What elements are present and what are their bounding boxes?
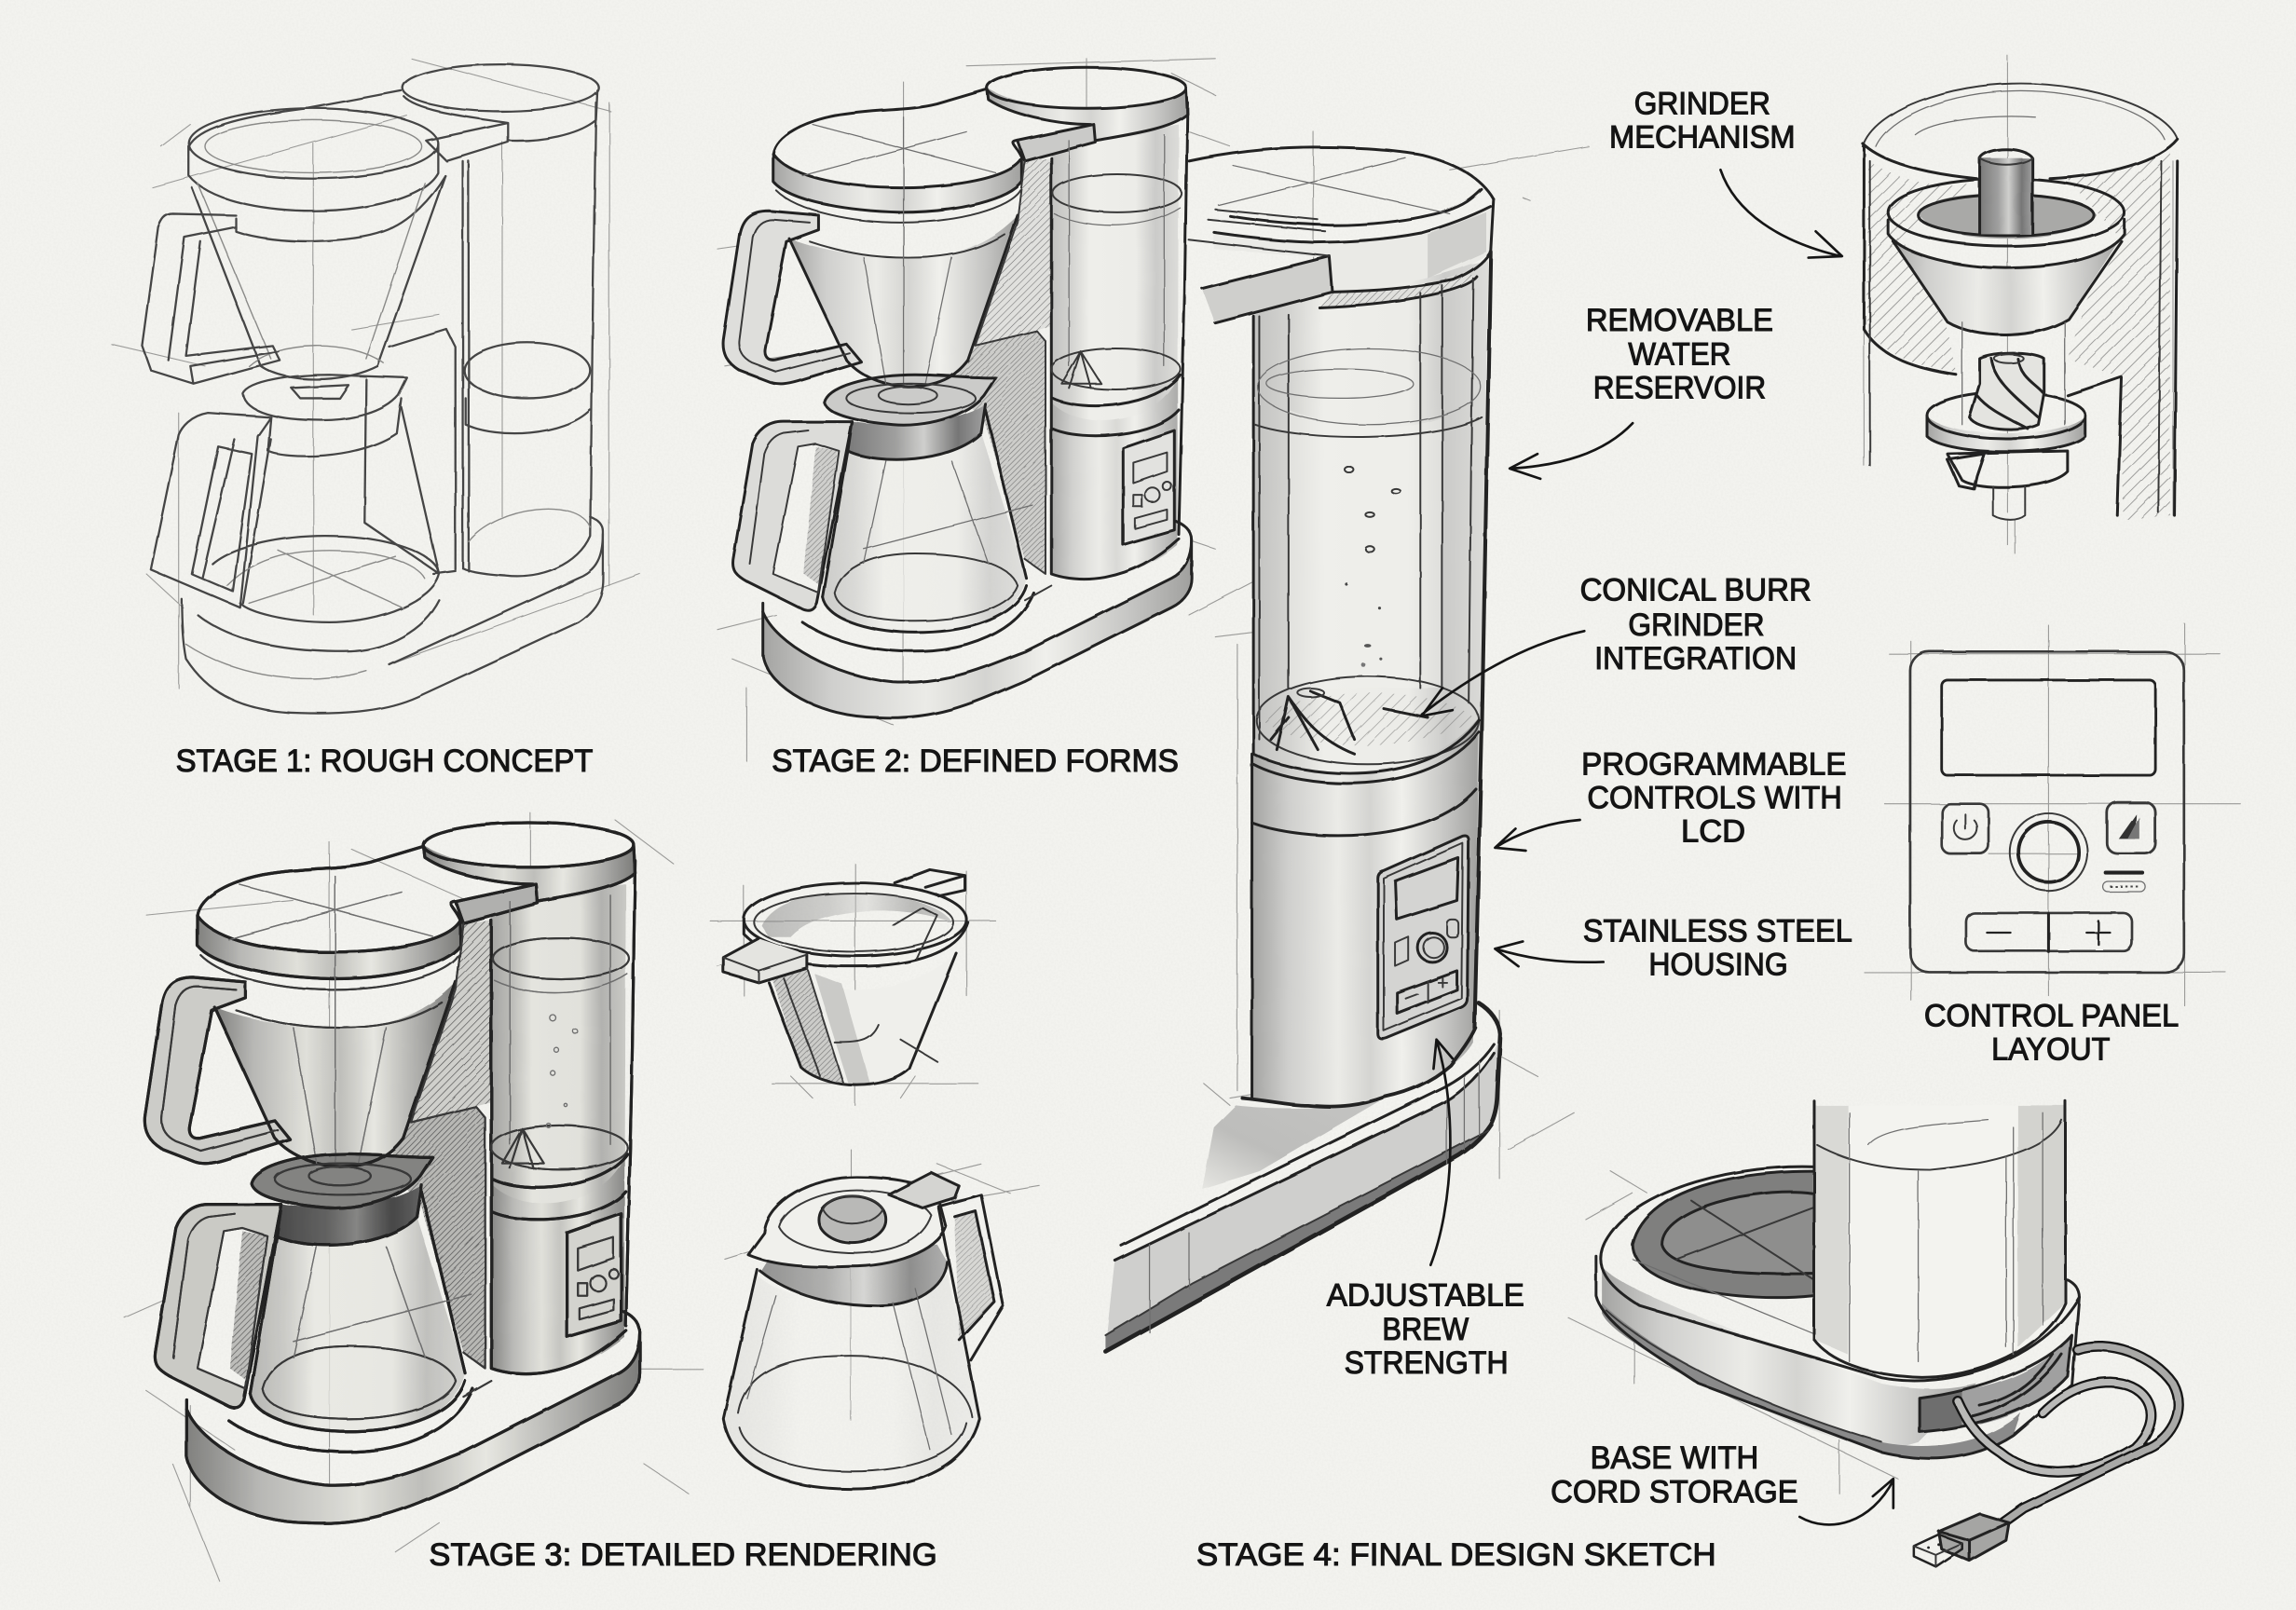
callout: grinder mechanism: MECHANISM: [1609, 120, 1796, 156]
filter shadow hatching: [772, 968, 842, 1082]
stage 4 construction lines: [1150, 131, 1589, 1332]
callout: adjustable brew strength: BREW: [1382, 1312, 1469, 1347]
panel: base with cord storage: [1568, 1101, 2179, 1566]
stage 4 lid streaks: [1428, 212, 1486, 279]
callout: control panel layout: [1924, 999, 2179, 1068]
base side shading: [1602, 1266, 1976, 1453]
callout: stainless steel housing: HOUSING: [1648, 948, 1788, 983]
stage 1 label: STAGE 1: ROUGH CONCEPT: [176, 744, 593, 779]
base outline: [1596, 1167, 2079, 1458]
callout: base with cord storage: [1551, 1440, 1798, 1509]
stage 4 housing: [1252, 717, 1479, 1106]
stage 4 floor shading: [1202, 1101, 1379, 1189]
callout: programmable controls with LCD: [1581, 746, 1847, 850]
callout: stainless steel housing: STAINLESS STEEL: [1583, 913, 1852, 948]
callout: adjustable brew strength: STRENGTH: [1345, 1345, 1509, 1381]
plus minus rocker: [1966, 913, 2132, 951]
grinder shaft: [1980, 149, 2032, 234]
stage 2 shading: [723, 88, 1192, 717]
stage 4 control panel: [1378, 836, 1469, 1039]
panel: stage 1 rough concept: [111, 59, 640, 714]
filter cone soft shade: [814, 974, 871, 1086]
stage 4 lid side: [1214, 207, 1491, 292]
central knob: [2010, 813, 2087, 891]
construction lines stage 3: [125, 812, 703, 1581]
carafe outlines: [723, 1173, 1003, 1489]
filter cone body: [769, 953, 956, 1085]
panel: stage 2 defined forms: [718, 59, 1274, 761]
stage 3 bubbles: [546, 1015, 577, 1127]
stage 4 bubbles: [1345, 467, 1401, 667]
stage 1 base: [182, 517, 603, 714]
stage 3 deeper shading: [144, 845, 640, 1523]
callout: adjustable brew strength: ADJUSTABLE: [1327, 1278, 1524, 1314]
stage 4 outlines: [1189, 147, 1494, 1107]
grinder hatch right: [2065, 146, 2170, 520]
grinder tank outline: [1863, 84, 2178, 515]
column: [1814, 1101, 2065, 1377]
carafe handle shading: [955, 1211, 994, 1340]
strength indicator: [2103, 873, 2145, 892]
grinder construction lines: [1864, 56, 2173, 553]
carafe collar shading: [761, 1245, 948, 1306]
stage 4 base: [1105, 1003, 1500, 1351]
panel: stage 4 final design sketch: [1105, 131, 1589, 1351]
stage 4 water clear zone: [1289, 410, 1442, 689]
stage 4 label: STAGE 4: FINAL DESIGN SKETCH: [1196, 1537, 1716, 1573]
cord storage slot: [1920, 1335, 2072, 1432]
stage 3 outlines: [144, 823, 640, 1523]
callout: removable water reservoir: WATER: [1628, 336, 1730, 372]
stage 4 bracket: [1202, 256, 1332, 323]
callout: programmable controls with LCD: PROGRAMMABLE: [1581, 746, 1847, 782]
stage 4 tank glass: [1253, 261, 1488, 1091]
callout: removable water reservoir: [1586, 303, 1773, 405]
panel: stage 3 detailed rendering: [125, 812, 703, 1581]
conical burr and flange: [1927, 322, 2085, 520]
callout: programmable controls with LCD: LCD: [1681, 814, 1745, 850]
stage 2 label: STAGE 2: DEFINED FORMS: [772, 744, 1179, 779]
callout: grinder mechanism: GRINDER: [1634, 87, 1770, 122]
arrow: stainless steel housing: [1495, 941, 1604, 966]
panel outline: [1910, 651, 2184, 972]
stage 4 hatched slit: [1319, 272, 1477, 307]
power cord: [1958, 1346, 2179, 1522]
stage 3 shading: [144, 845, 640, 1523]
callout: grinder mechanism: [1609, 87, 1796, 156]
stage 1 back panel: [364, 330, 456, 574]
power button: [1942, 804, 1988, 853]
warming plate: [1633, 1171, 1816, 1298]
strength button: [2107, 802, 2155, 853]
stage 3 dark carafe lid: [252, 1153, 432, 1245]
callout: control panel layout: CONTROL PANEL: [1924, 999, 2179, 1034]
carafe construction lines: [725, 1150, 1040, 1420]
arrow: adjustable brew strength: [1430, 1040, 1453, 1265]
arrow: water reservoir: [1510, 423, 1633, 479]
arrow: base with cord storage: [1799, 1479, 1893, 1524]
stage 4 base underside: [1105, 1125, 1491, 1351]
callout: conical burr grinder integration: [1580, 572, 1811, 676]
callout: conical burr grinder integration: GRINDER: [1628, 607, 1765, 643]
panel: carafe detail: [723, 1150, 1040, 1489]
LCD screen: [1942, 680, 2155, 775]
stage 2 outlines: [723, 67, 1192, 717]
arrow: programmable controls: [1495, 820, 1580, 851]
stage 1 tank: [403, 64, 599, 576]
filter basket outlines: [723, 869, 968, 1085]
arrow: grinder mechanism: [1720, 170, 1842, 258]
panel: filter basket detail: [710, 864, 996, 1105]
stage 1 filter handle: [142, 213, 280, 384]
stage 1 carafe: [151, 375, 439, 622]
panel: grinder mechanism detail: [1863, 56, 2178, 553]
stage 3 transformed machine: [144, 823, 640, 1523]
arrow: conical burr grinder: [1422, 631, 1584, 716]
callout: base with cord storage: BASE WITH: [1591, 1440, 1758, 1476]
callout: base with cord storage: CORD STORAGE: [1551, 1474, 1798, 1509]
callout: adjustable brew strength: [1327, 1278, 1524, 1381]
panel: control panel layout: [1864, 623, 2240, 1006]
USB plug: [1914, 1514, 2009, 1566]
stage 3 label: STAGE 3: DETAILED RENDERING: [429, 1537, 937, 1573]
stage 1 brew lid and cone: [189, 90, 445, 379]
construction lines stage 1: [111, 59, 640, 689]
stage 3 line reinforcement: [144, 823, 640, 1523]
callout: conical burr grinder integration: CONICAL BURR: [1580, 572, 1811, 607]
grinder cone: [1888, 179, 2125, 334]
callout: conical burr grinder integration: INTEGRATION: [1594, 641, 1797, 676]
callout: programmable controls with LCD: CONTROLS WITH: [1587, 780, 1842, 815]
filter inner shade: [761, 894, 951, 937]
filter construction lines: [710, 864, 996, 1105]
base bottom hatch: [1602, 1303, 2021, 1458]
construction lines stage 2: [718, 59, 1274, 761]
carafe glass shading: [723, 1274, 979, 1489]
stage 4 base band: [1105, 1033, 1500, 1351]
callout: stainless steel housing: [1583, 913, 1852, 983]
callout: control panel layout: LAYOUT: [1991, 1032, 2110, 1068]
grinder housing step: [2068, 377, 2122, 515]
callout: removable water reservoir: RESERVOIR: [1593, 370, 1766, 405]
grinder hatch left: [1867, 161, 1970, 372]
control panel grid lines: [1864, 623, 2240, 1006]
base construction lines: [1568, 1171, 1898, 1494]
callout: removable water reservoir: REMOVABLE: [1586, 303, 1773, 338]
